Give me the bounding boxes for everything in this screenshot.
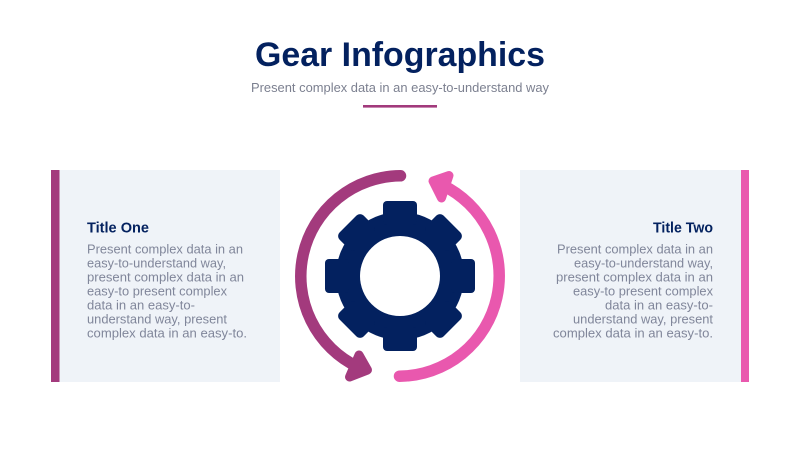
text block: title one body: present complex data in an <box>87 270 244 284</box>
title underline <box>363 105 437 108</box>
text block: title one body: understand way, present <box>87 312 227 327</box>
text block: title one body: easy-to-understand way, <box>87 255 226 270</box>
arrow: left arc <box>301 176 400 377</box>
text block: title two body: Present complex data in an <box>557 241 713 256</box>
text block: title two body: present complex data in an <box>556 270 713 284</box>
arrow: right arc <box>400 176 499 376</box>
text block: title two body: easy-to present complex <box>573 284 713 298</box>
heading: title one: Title One <box>87 220 149 236</box>
text block: title two body: data in an easy-to- <box>605 298 713 313</box>
heading: title two: Title Two <box>653 220 713 236</box>
text block: title two body: easy-to-understand way, <box>574 255 713 270</box>
panel accent bar: right <box>741 170 749 382</box>
text block: title two body <box>553 241 713 341</box>
title: Gear Infographics <box>255 36 545 74</box>
text block: title one body: data in an easy-to- <box>87 298 195 313</box>
text block: title one body: complex data in an easy-to. <box>87 326 247 341</box>
subtitle: Present complex data in an easy-to-understand way <box>251 80 549 95</box>
text block: title one body: Present complex data in an <box>87 241 243 256</box>
text block: title two body: complex data in an easy-to. <box>553 326 713 341</box>
panel: title one <box>51 170 280 382</box>
panel: title two <box>520 170 749 382</box>
text block: title one body <box>87 241 247 341</box>
icon: gear <box>325 201 475 351</box>
text block: title two body: understand way, present <box>573 312 713 327</box>
text block: title one body: easy-to present complex <box>87 284 227 298</box>
panel accent bar: left <box>51 170 60 382</box>
